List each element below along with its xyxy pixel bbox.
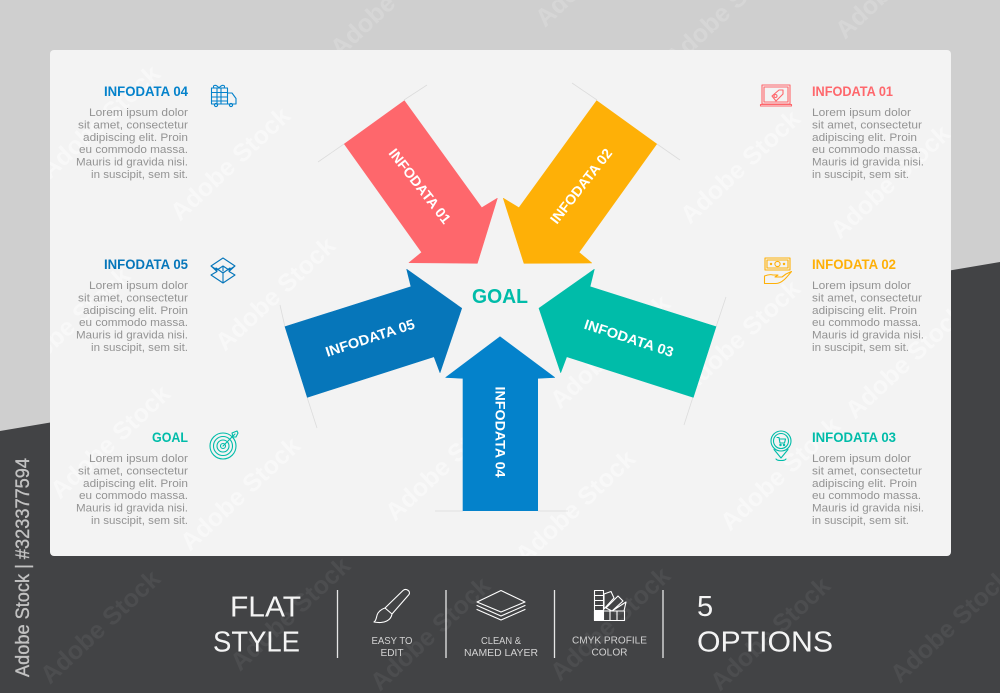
icon: target with dart [210, 431, 238, 459]
center label: goal: GOAL [472, 286, 528, 308]
watermarks on background [325, 0, 961, 72]
text block: infodata 05: sit amet, consectetur [78, 292, 188, 304]
text block: infodata 05: INFODATA 05 [104, 257, 188, 272]
text block: infodata 02: eu commodo massa. [812, 317, 921, 329]
icon: paint brush [374, 590, 409, 623]
arrow: infodata 01: INFODATA 01 [386, 145, 454, 227]
watermarks on panel: Adobe Stock [675, 105, 806, 229]
feature: clean and named layer [464, 635, 538, 659]
text block: infodata 04: eu commodo massa. [79, 144, 188, 156]
watermarks on dark band: Adobe Stock [545, 562, 676, 686]
footer title: 5 options: 5 [697, 591, 713, 623]
watermarks on panel: Adobe Stock [545, 290, 676, 414]
watermarks on dark band: Adobe Stock [705, 572, 836, 693]
text block: infodata 05: in suscipit, sem sit. [91, 342, 188, 354]
icon: hand holding cash [764, 258, 792, 284]
footer title: 5 options [697, 591, 833, 659]
watermarks on panel: Adobe Stock [675, 275, 806, 399]
feature: clean and named layer: CLEAN & [481, 635, 521, 647]
text block: infodata 02: sit amet, consectetur [812, 292, 922, 304]
feature: easy to edit [372, 635, 412, 659]
icon: laptop with price tag [760, 85, 792, 106]
text block: goal: Mauris id gravida nisi. [76, 503, 188, 515]
watermarks on panel: Adobe Stock [840, 300, 971, 424]
feature: easy to edit: EDIT [380, 647, 404, 659]
text block: infodata 03: INFODATA 03 [812, 430, 896, 445]
icon: color swatch fan [594, 590, 626, 620]
feature: cmyk profile color: COLOR [592, 646, 628, 658]
text block: infodata 01: adipiscing elit. Proin [812, 132, 917, 144]
arrow: infodata 05 [285, 269, 462, 397]
watermarks on panel: Adobe Stock [5, 262, 136, 386]
watermarks on panel: Adobe Stock [165, 102, 296, 226]
text block: infodata 02: INFODATA 02 [812, 257, 896, 272]
text block: infodata 03: adipiscing elit. Proin [812, 478, 917, 490]
icon: location pin with cart [771, 431, 791, 460]
text block: infodata 04: in suscipit, sem sit. [91, 169, 188, 181]
arrow: infodata 02 [503, 101, 657, 263]
watermarks on panel: Adobe Stock [715, 412, 846, 536]
watermarks on panel: Adobe Stock [175, 432, 306, 556]
watermarks on dark band: Adobe Stock [225, 552, 356, 676]
text block: infodata 04: adipiscing elit. Proin [83, 132, 188, 144]
text block: infodata 04: sit amet, consectetur [78, 119, 188, 131]
text block: infodata 04: Mauris id gravida nisi. [76, 157, 188, 169]
arrow: infodata 02: INFODATA 02 [547, 145, 615, 227]
text block: infodata 05: Lorem ipsum dolor [89, 280, 188, 292]
text block: infodata 02: Mauris id gravida nisi. [812, 330, 924, 342]
text block: goal: GOAL [152, 430, 188, 445]
text block: infodata 03: Lorem ipsum dolor [812, 453, 911, 465]
text block: infodata 01: in suscipit, sem sit. [812, 169, 909, 181]
arrow: infodata 03 [539, 269, 716, 397]
watermarks on panel: Adobe Stock [45, 380, 176, 504]
text block: goal: eu commodo massa. [79, 490, 188, 502]
text block: goal: Lorem ipsum dolor [89, 453, 188, 465]
text block: infodata 02: Lorem ipsum dolor [812, 280, 911, 292]
watermarks on panel: Adobe Stock [825, 120, 956, 244]
arrow: infodata 04: INFODATA 04 [492, 386, 508, 478]
text block: infodata 05: adipiscing elit. Proin [83, 305, 188, 317]
arrow: infodata 01 [344, 101, 497, 263]
text block: infodata 04: Lorem ipsum dolor [89, 107, 188, 119]
icon: gift delivery truck [212, 85, 236, 107]
text block: infodata 01 [812, 84, 924, 181]
text block: goal: sit amet, consectetur [78, 465, 188, 477]
text block: goal: in suscipit, sem sit. [91, 515, 188, 527]
feature: easy to edit: EASY TO [372, 635, 412, 647]
text block: infodata 02 [812, 257, 924, 354]
arrow: infodata 03: INFODATA 03 [582, 316, 676, 360]
icon: open box [211, 258, 235, 283]
text block: infodata 03: in suscipit, sem sit. [812, 515, 909, 527]
watermarks on dark band: Adobe Stock [365, 572, 496, 693]
watermarks on panel [5, 60, 971, 569]
text block: infodata 02: in suscipit, sem sit. [812, 342, 909, 354]
text block: infodata 02: adipiscing elit. Proin [812, 305, 917, 317]
text block: infodata 01: INFODATA 01 [812, 84, 893, 99]
watermarks on panel: Adobe Stock [35, 60, 166, 184]
side watermark: stock id: Adobe Stock | #323377594 [13, 458, 34, 677]
text block: infodata 01: eu commodo massa. [812, 144, 921, 156]
text block: infodata 03: sit amet, consectetur [812, 465, 922, 477]
text block: goal [76, 430, 188, 527]
watermarks on panel: Adobe Stock [510, 445, 641, 569]
arrow: infodata 04 [446, 337, 555, 511]
text block: infodata 05 [76, 257, 188, 354]
text block: goal: adipiscing elit. Proin [83, 478, 188, 490]
footer dividers [338, 590, 663, 658]
footer title: flat style [213, 592, 301, 659]
panel: main card [50, 50, 951, 556]
text block: infodata 01: Lorem ipsum dolor [812, 107, 911, 119]
watermarks on panel: Adobe Stock [210, 232, 341, 356]
watermarks on panel: Adobe Stock [380, 402, 511, 526]
watermarks on dark band [35, 552, 1000, 693]
feature: cmyk profile color [572, 634, 647, 658]
text block: infodata 01: Mauris id gravida nisi. [812, 157, 924, 169]
text block: infodata 03 [812, 430, 924, 527]
text block: infodata 05: eu commodo massa. [79, 317, 188, 329]
arrow: infodata 05: INFODATA 05 [323, 316, 417, 360]
arrow tail shadows [280, 83, 726, 511]
feature: cmyk profile color: CMYK PROFILE [572, 634, 647, 646]
footer title: flat style: STYLE [213, 627, 300, 659]
feature: clean and named layer: NAMED LAYER [464, 647, 538, 659]
watermarks on dark band: Adobe Stock [35, 565, 166, 689]
text block: infodata 01: sit amet, consectetur [812, 119, 922, 131]
background: dark angled band [0, 262, 1000, 693]
text block: infodata 05: Mauris id gravida nisi. [76, 330, 188, 342]
text block: infodata 04 [76, 84, 188, 181]
icon: layers [477, 590, 525, 620]
text block: infodata 03: eu commodo massa. [812, 490, 921, 502]
footer title: 5 options: OPTIONS [697, 627, 833, 659]
text block: infodata 03: Mauris id gravida nisi. [812, 503, 924, 515]
text block: infodata 04: INFODATA 04 [104, 84, 188, 99]
footer title: flat style: FLAT [230, 592, 301, 624]
